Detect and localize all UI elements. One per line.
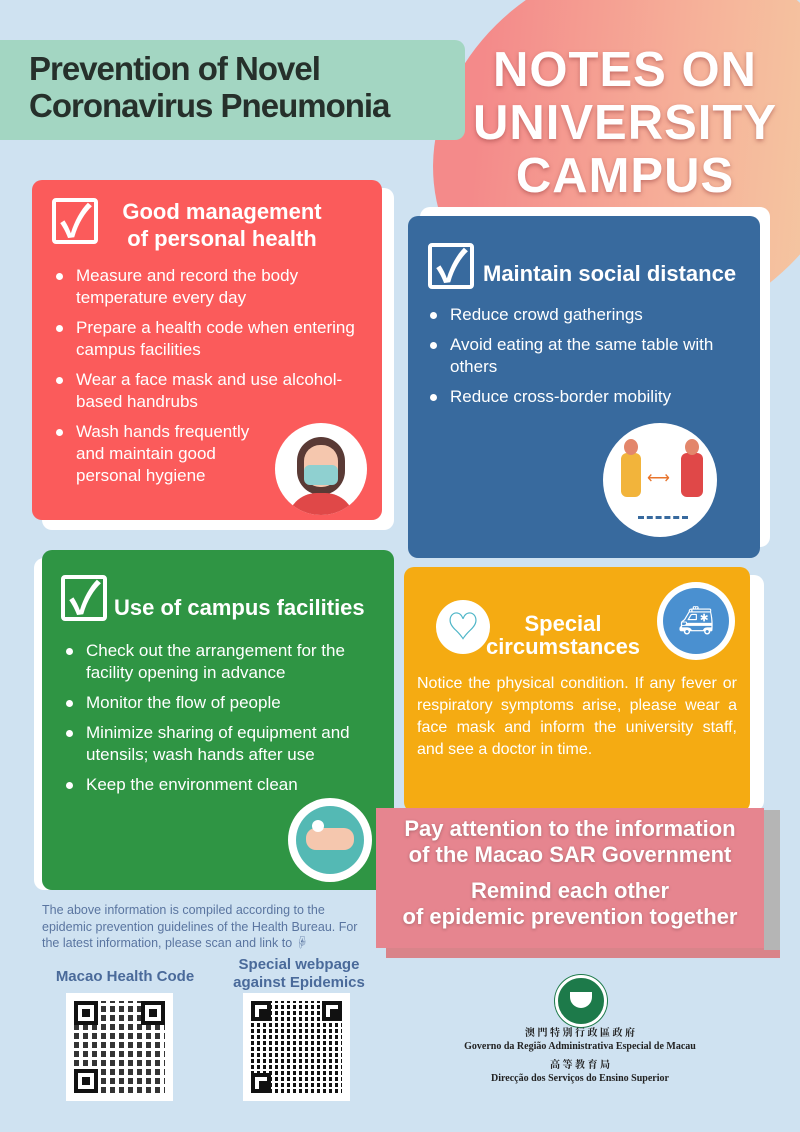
QR code 2 [243,993,350,1101]
main heading: UNIVERSITY [473,96,777,150]
QR label 1: Macao Health Code [56,968,194,985]
main heading [473,43,777,203]
panel: campus facilities [34,550,394,890]
QR label 2: against Epidemics [233,974,365,991]
title box: Prevention of Novel [29,50,320,87]
government text: Governo da Região Administrativa Especial de Macau 高 等 教 育 局 [464,1041,696,1071]
heading [122,199,322,251]
heading: Maintain social distance [483,261,736,286]
bullet list: Minimize sharing of equipment and utensils; wash hands after use [86,723,350,764]
bullet list: Monitor the flow of people [86,693,281,712]
panel: personal health [32,180,394,530]
icon: checkbox: ✓ [60,198,92,247]
government text: Direcção dos Serviços do Ensino Superior [491,1073,669,1084]
bullet list: Wear a face mask and use alcohol-based handrubs [76,370,342,411]
icon: hand washing [288,798,372,882]
text block: Notice the physical condition. If any fever or respiratory symptoms arise, please wear a face mask and inform the university staff, and see a doctor in time. [417,675,737,758]
QR label 2: Special webpage [239,956,359,973]
icon: checkbox [52,198,98,244]
main heading: NOTES ON [493,43,757,97]
bullet list: Reduce cross-border mobility [450,387,671,406]
footer note: The above information is compiled according to the epidemic prevention guidelines of the Health Bureau. For the latest information, please scan and link to ☟ [42,903,357,950]
bullet list [430,305,713,406]
panel: social distance [408,207,770,558]
bullet list: Prepare a health code when entering campus facilities [76,318,355,359]
icon: masked person [275,423,367,515]
heading: circumstances [486,634,640,659]
QR label 2 [233,956,365,991]
icon: checkbox: ✓ [436,243,468,292]
government text [464,1027,696,1084]
bullet list: Check out the arrangement for the facility opening in advance [86,641,345,682]
bullet list [56,266,355,485]
icon: heart: ♡ [447,609,479,645]
heading: Special [524,611,602,636]
bullet list: and maintain good [76,444,216,463]
bullet list: Wash hands frequently [76,422,249,441]
icon: ambulance [657,582,735,660]
heading [486,611,640,659]
heading: of personal health [127,226,317,251]
callout banner [376,808,780,958]
icon: checkbox [61,575,107,621]
icon: two people distanced [603,423,717,537]
government text: 澳 門 特 別 行 政 區 政 府 [525,1028,635,1039]
icon: two people distanced: ⟷ [647,470,670,487]
bullet list: Reduce crowd gatherings [450,305,643,324]
bullet list: Avoid eating at the same table with others [450,335,713,376]
callout banner: Pay attention to the information [404,816,736,841]
bullet list [66,641,350,794]
title box: Coronavirus Pneumonia [29,87,389,124]
bullet list: personal hygiene [76,466,205,485]
panel: special circumstances [404,567,764,808]
heading: Good management [122,199,322,224]
heading: Use of campus facilities [114,595,365,620]
icon: checkbox [428,243,474,289]
bullet list: Keep the environment clean [86,775,298,794]
icon: heart [436,600,490,654]
title box [0,40,465,140]
emblem [555,975,607,1027]
icon: ambulance: 🚑︎ [678,605,714,636]
decorative blob [370,0,800,404]
callout banner: of epidemic prevention together [403,904,737,929]
callout banner: of the Macao SAR Government Remind each other [409,842,731,903]
bullet list: Measure and record the body temperature every day [76,266,298,307]
main heading: CAMPUS [516,149,734,203]
QR code 1 [66,993,173,1101]
icon: checkbox: ✓ [69,575,101,624]
